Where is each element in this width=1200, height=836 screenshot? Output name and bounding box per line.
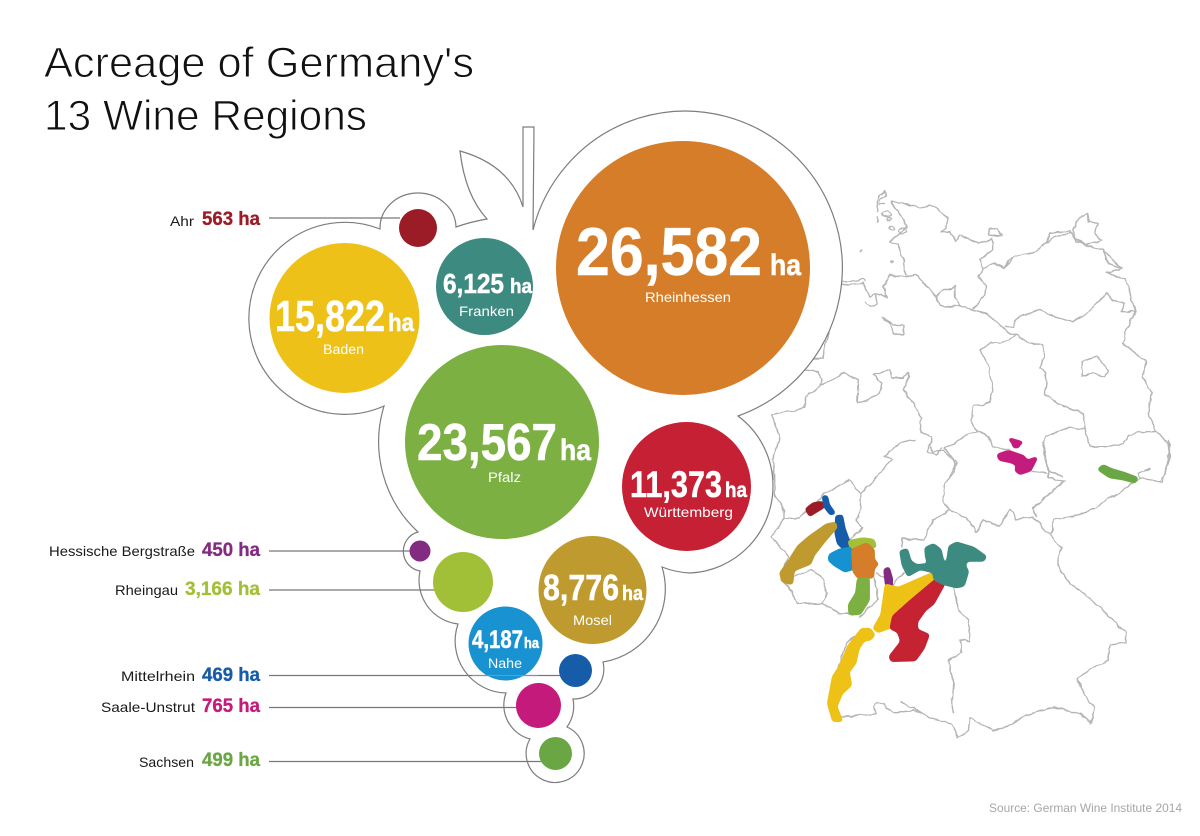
label: Saale-Unstrut: Saale-Unstrut (101, 699, 195, 715)
bubble: Ahr (399, 209, 437, 247)
bubble: Nahe: 4,187 (472, 626, 523, 654)
region: Baden south (828, 629, 874, 721)
title (44, 39, 474, 140)
bubble: Rheinhessen (556, 141, 810, 395)
bubble: Pfalz: Pfalz (488, 469, 521, 485)
label: Hessische Bergstrasse: Hessische Bergstraße (49, 543, 195, 559)
label: Sachsen: 499 ha (202, 750, 260, 771)
state borders, south (772, 440, 1170, 738)
bubble: Rheinhessen: 26,582 (576, 214, 762, 290)
region: Mittelrhein (823, 497, 851, 549)
label: Hessische Bergstrasse: 450 ha (202, 540, 260, 561)
title: 13 Wine Regions (44, 92, 367, 140)
region: Nahe (829, 548, 853, 571)
bubble: Wuerttemberg (622, 422, 751, 551)
bubble: Sachsen (539, 737, 572, 770)
wine regions on map (781, 439, 1137, 721)
region: Rheingau (849, 539, 875, 548)
label: Sachsen: Sachsen (139, 754, 194, 770)
bubble: Nahe: Nahe (488, 655, 522, 671)
label: Saale-Unstrut (101, 696, 260, 717)
label: Ahr: 563 ha (202, 209, 260, 230)
bubble: Saale-Unstrut (516, 683, 561, 728)
region: Ahr (807, 503, 823, 515)
bubble: Pfalz: ha (560, 434, 591, 467)
title: Acreage of Germany's (44, 39, 474, 87)
bubble: Wuerttemberg: ha (725, 479, 747, 502)
bubble: Hessische Bergstrasse (410, 540, 430, 562)
region: Saale-Unstrut (998, 439, 1036, 473)
label: Hessische Bergstrasse (49, 540, 260, 561)
region: Sachsen (1099, 466, 1137, 482)
source note: Source: German Wine Institute 2014 (989, 801, 1182, 815)
bubble: Baden (270, 243, 420, 393)
label: Rheingau: 3,166 ha (185, 579, 260, 600)
label: Rheingau: Rheingau (115, 582, 178, 598)
region: Mosel (781, 523, 836, 583)
bubble: Franken: 6,125 (443, 268, 504, 299)
bubble: Baden: 15,822 (275, 292, 385, 341)
label: Mittelrhein (121, 665, 260, 686)
label: Rheingau (115, 579, 260, 600)
grape bunch outline (249, 111, 842, 782)
bubble: Rheinhessen: ha (770, 249, 801, 282)
map of Germany (772, 191, 1170, 738)
bubble: Mosel: 8,776 (543, 567, 619, 608)
state borders, north (772, 191, 1168, 480)
leader lines (269, 218, 561, 762)
bubble: Baden: ha (388, 309, 415, 337)
bubble: Rheinhessen: Rheinhessen (645, 289, 731, 305)
label: Mittelrhein: Mittelrhein (121, 668, 195, 684)
region: Franken (901, 543, 985, 587)
bubble: Wuerttemberg: Württemberg (644, 504, 733, 520)
bubble: Mosel (538, 536, 646, 644)
bubble: Franken: ha (510, 276, 533, 298)
region: Hessische Bergstrasse (885, 568, 892, 585)
region: Wuerttemberg (890, 579, 944, 661)
label: Saale-Unstrut: 765 ha (202, 696, 260, 717)
bubble: Mittelrhein (559, 654, 592, 687)
bubble: Franken: Franken (459, 303, 514, 319)
bubble: Pfalz: 23,567 (417, 414, 557, 472)
region: Pfalz (849, 579, 868, 614)
bubble: Nahe: ha (524, 635, 540, 652)
label: Mittelrhein: 469 ha (202, 665, 260, 686)
bubble: Rheingau (433, 552, 493, 612)
bubble: Baden: Baden (323, 341, 364, 357)
bubble: Wuerttemberg: 11,373 (630, 464, 722, 505)
region: Baden north (874, 572, 937, 632)
label: Sachsen (139, 750, 260, 771)
bubble: Franken (436, 238, 533, 335)
bubble: Mosel: ha (622, 583, 644, 605)
label: Ahr: Ahr (170, 213, 194, 229)
bubble: Mosel: Mosel (573, 612, 612, 628)
bubble: Pfalz (405, 345, 599, 539)
bubble: Nahe (468, 606, 542, 680)
region: Rheinhessen (853, 544, 877, 579)
label: Ahr (170, 209, 260, 230)
